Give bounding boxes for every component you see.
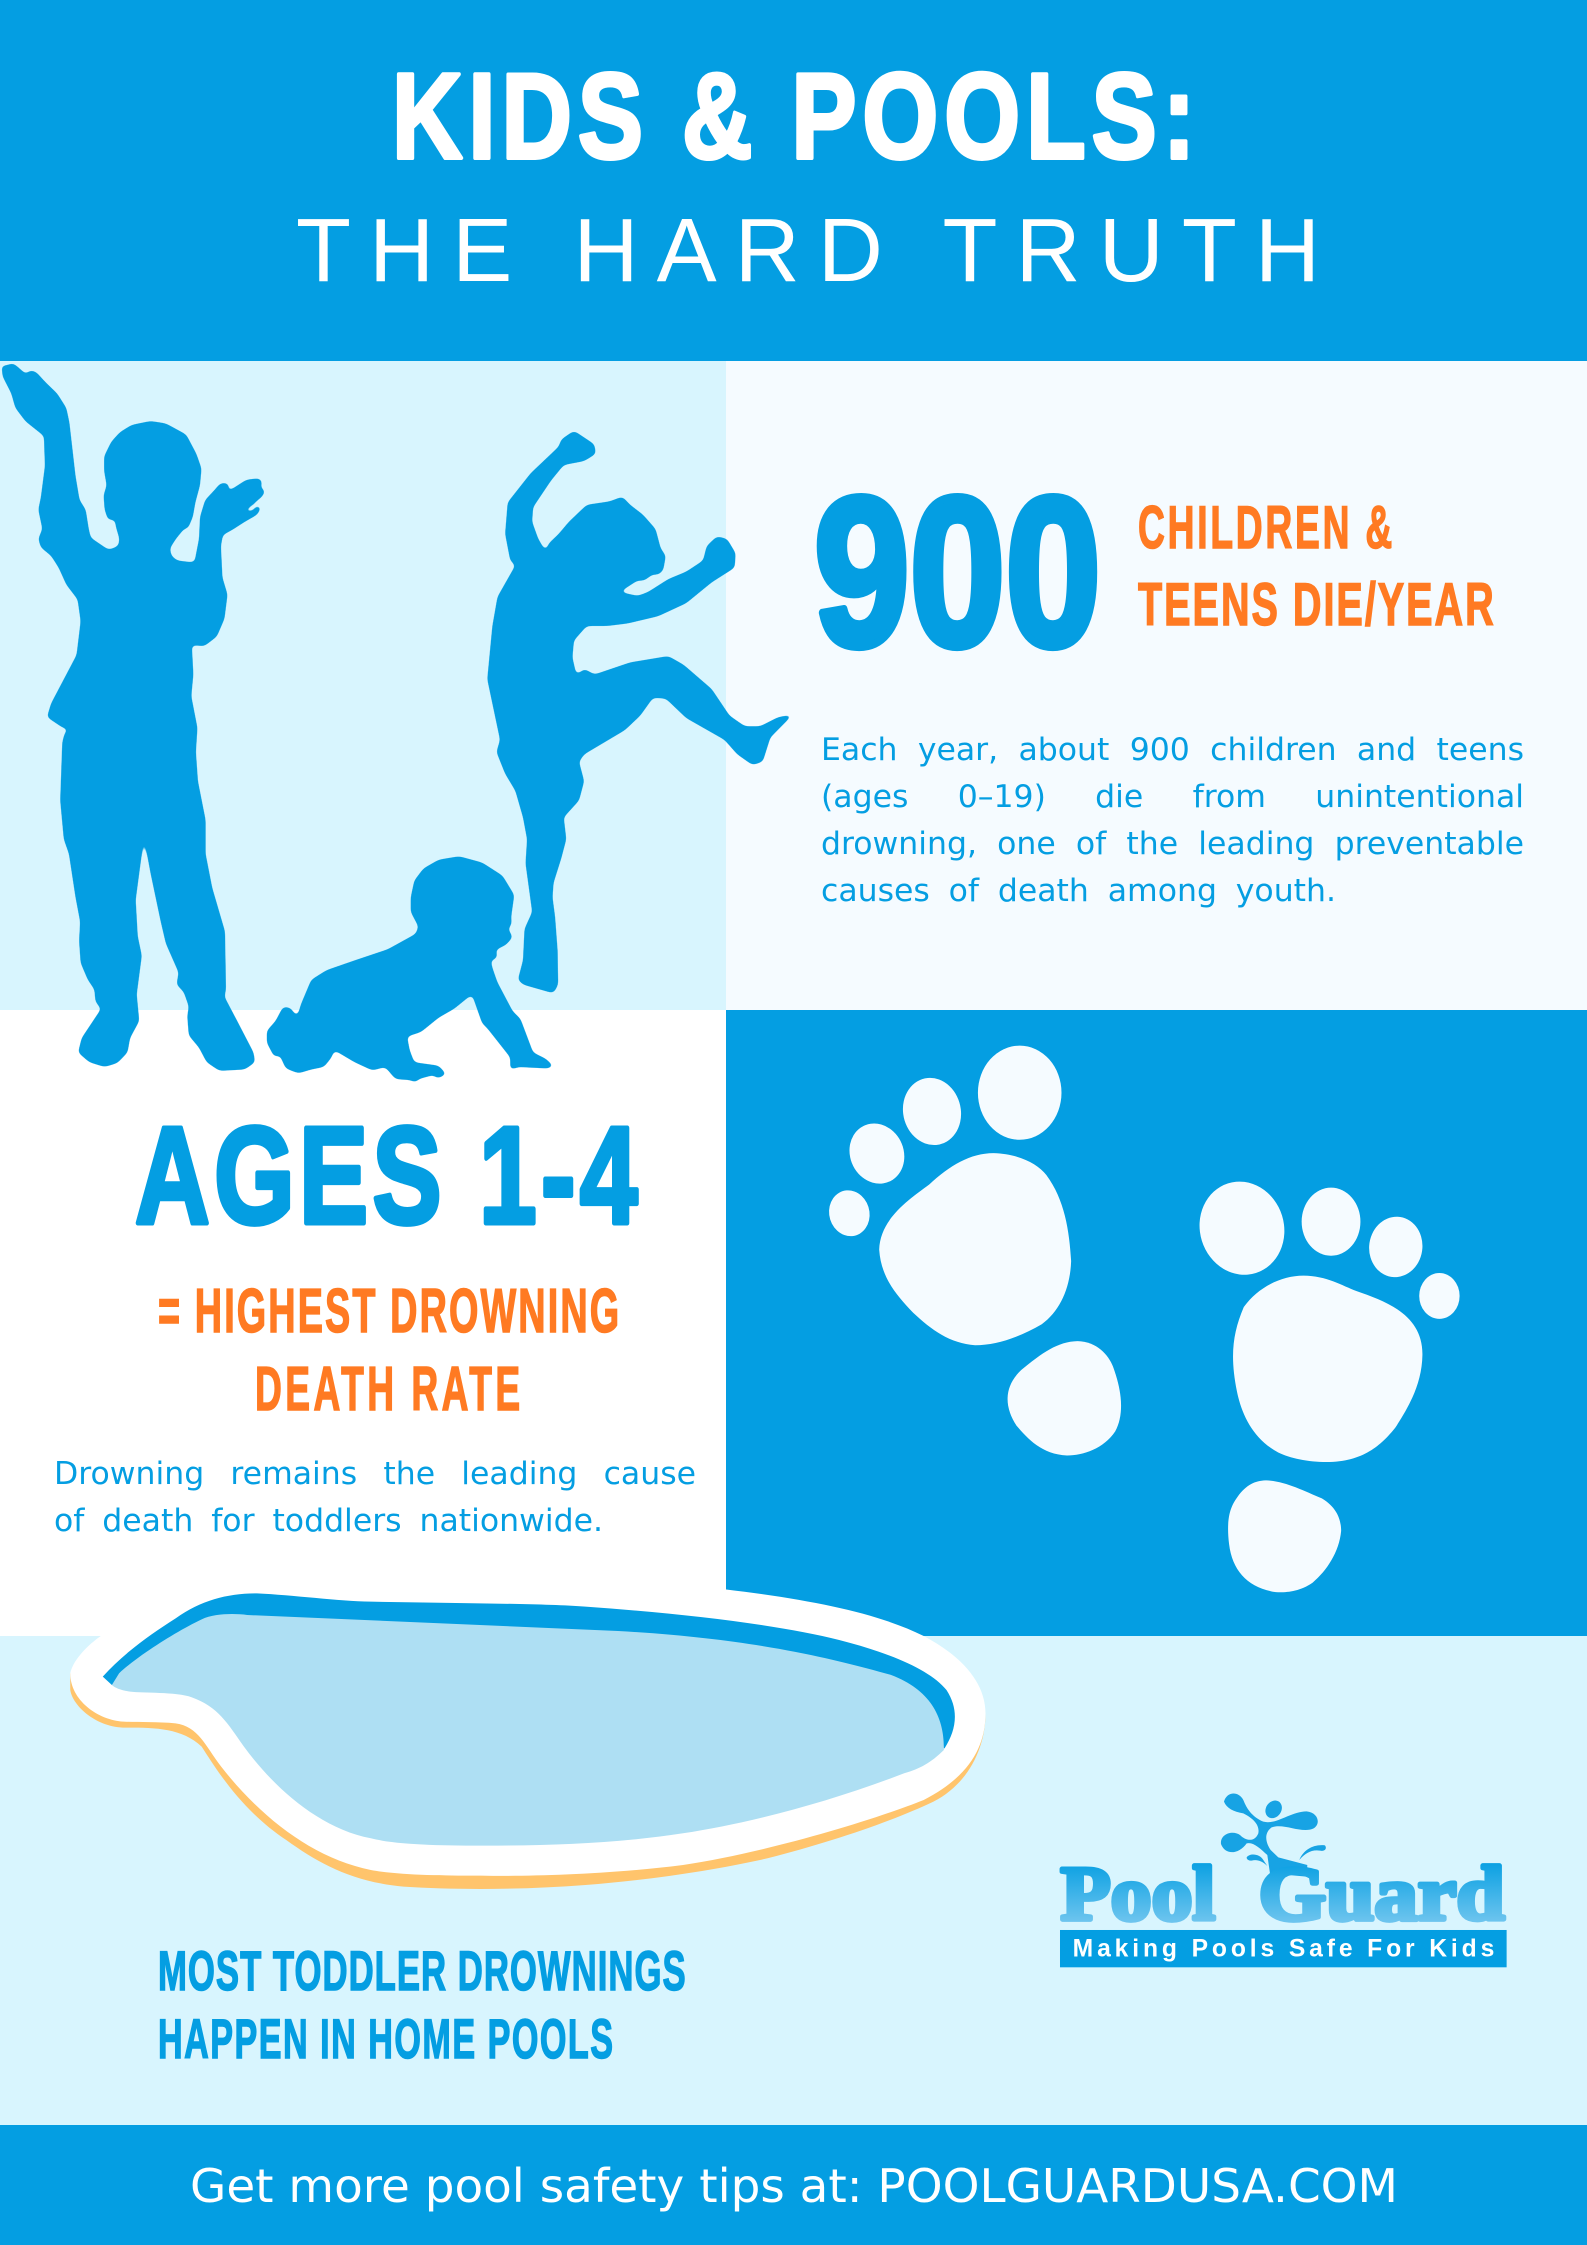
text block: toddler leading cause: of death for toddlers nationwide. <box>54 1503 603 1539</box>
pool water <box>112 1614 944 1846</box>
heading: highest drowning death rate: = HIGHEST DROWNING <box>158 1276 619 1345</box>
panel: pool and logo background <box>0 1636 1587 2125</box>
text block: toddler leading cause <box>54 1456 696 1539</box>
footer call to action: Get more pool safety tips at: POOLGUARDUSA.COM <box>190 2159 1398 2213</box>
logo tagline: Making Pools Safe For Kids <box>1073 1936 1494 1963</box>
heading: children and teens: CHILDREN & <box>1138 494 1392 561</box>
title: KIDS & POOLS: <box>392 49 1195 185</box>
panel: silhouettes background <box>0 361 726 1010</box>
icon: children silhouettes <box>2 363 793 1083</box>
heading: highest drowning death rate <box>158 1276 619 1423</box>
logo: Pool Guard <box>1060 1794 1507 1967</box>
text block: 900 deaths explanation: (ages 0–19) die from unintentional <box>821 779 1524 815</box>
panel: footer band <box>0 2125 1587 2245</box>
heading: highest drowning death rate: DEATH RATE <box>255 1354 520 1423</box>
icon: water splash <box>1221 1794 1326 1877</box>
big number 900: 900 <box>814 453 1101 690</box>
icon: standing child <box>2 363 265 1071</box>
panel: footprints background <box>726 1010 1587 1636</box>
icon: right foot <box>1194 1178 1460 1592</box>
pool inner wall <box>103 1593 955 1748</box>
icon: baby footprints <box>826 1046 1460 1592</box>
heading: ages 1-4: AGES 1-4 <box>135 1099 638 1252</box>
logo tagline banner <box>1060 1930 1507 1967</box>
text block: 900 deaths explanation: causes of death among youth. <box>821 873 1336 909</box>
pool shadow <box>70 1673 986 1889</box>
logo wordmark <box>1061 1850 1505 1936</box>
panel: ages statistic <box>0 1010 726 1636</box>
icon: jumping child <box>487 431 793 993</box>
pool deck <box>70 1580 986 1876</box>
heading: most toddler drownings: HAPPEN IN HOME POOLS <box>158 2007 613 2070</box>
text block: 900 deaths explanation <box>821 732 1524 909</box>
heading: most toddler drownings <box>158 1940 686 2070</box>
logo wordmark: Pool <box>1061 1850 1215 1936</box>
heading: children and teens: TEENS DIE/YEAR <box>1138 571 1494 638</box>
icon: left foot <box>826 1046 1121 1456</box>
panel: header band <box>0 0 1587 361</box>
text block: 900 deaths explanation: drowning, one of the leading preventable <box>821 826 1524 862</box>
text block: 900 deaths explanation: Each year, about 900 children and teens <box>821 732 1524 768</box>
heading: most toddler drownings: MOST TODDLER DROWNINGS <box>158 1940 686 2002</box>
icon: crawling baby <box>267 856 554 1083</box>
heading: children and teens <box>1138 494 1494 638</box>
panel: 900 statistic <box>726 361 1587 1010</box>
icon: swimming pool <box>70 1580 986 1889</box>
logo wordmark: Guard <box>1259 1850 1505 1936</box>
text block: toddler leading cause: Drowning remains the leading cause <box>54 1456 696 1492</box>
title: THE HARD TRUTH <box>296 201 1320 301</box>
title <box>296 49 1320 301</box>
